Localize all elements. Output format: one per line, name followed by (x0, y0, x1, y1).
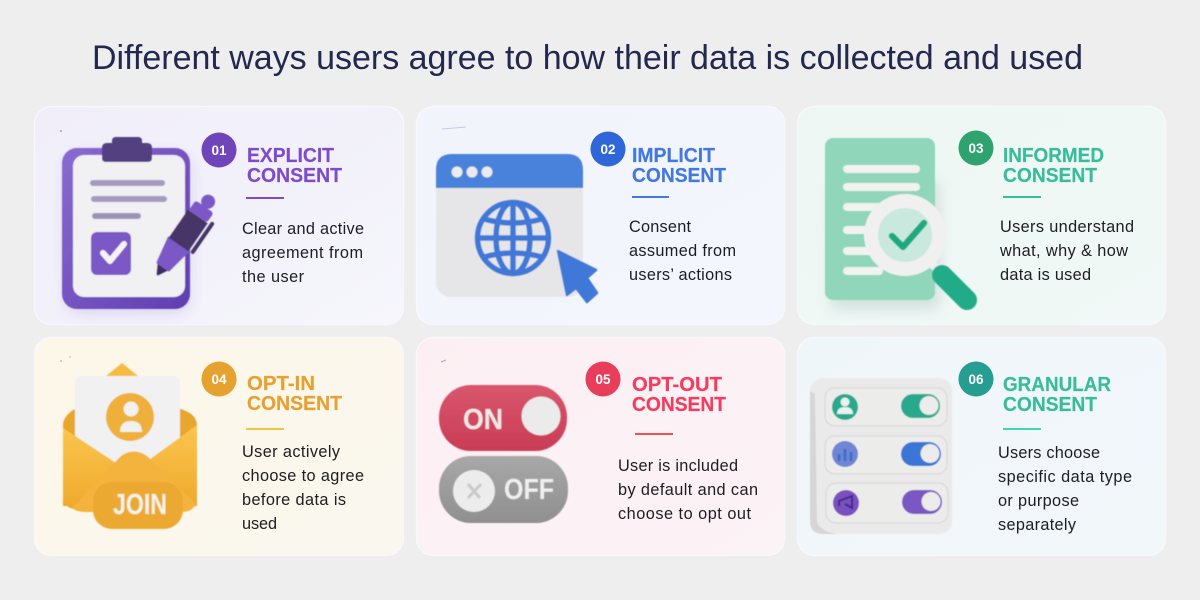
heading (632, 145, 726, 187)
description: assumed from (629, 242, 736, 260)
panel: informed consent (798, 106, 1166, 324)
number badge 05 (586, 362, 620, 396)
description (242, 443, 364, 533)
heading (1003, 374, 1112, 416)
heading: CONSENT (632, 165, 726, 187)
description: agreement from (242, 244, 363, 262)
heading: CONSENT (247, 165, 342, 187)
description (242, 220, 364, 286)
heading: INFORMED (1003, 145, 1104, 167)
heading: CONSENT (247, 393, 342, 415)
heading: EXPLICIT (247, 145, 334, 167)
icon: on and off toggles (439, 385, 568, 523)
icon: clipboard and pen (62, 137, 225, 313)
description: or purpose (998, 492, 1079, 510)
number badge 02: 02 (600, 142, 616, 157)
description: Users understand (1000, 218, 1134, 236)
description: choose to opt out (618, 505, 751, 523)
description: before data is (242, 491, 346, 509)
icon: on and off toggles: ON (463, 404, 503, 436)
icon: browser window with globe and cursor (436, 154, 597, 302)
description: separately (998, 516, 1077, 534)
number badge 01 (202, 132, 236, 168)
number badge 02 (590, 132, 626, 166)
description (629, 218, 736, 284)
icon: envelope with join button (63, 363, 197, 529)
number badge 01: 01 (211, 143, 227, 158)
heading: OPT-OUT (632, 374, 722, 396)
number badge 04 (202, 362, 236, 396)
heading (632, 374, 726, 416)
heading (247, 145, 342, 187)
description (999, 218, 1134, 284)
icon: envelope with join button: JOIN (113, 489, 167, 521)
panel: opt-out consent (416, 338, 784, 556)
description: used (242, 515, 277, 533)
description: Clear and active (242, 220, 364, 238)
number badge 03: 03 (968, 141, 984, 156)
number badge 05: 05 (595, 372, 611, 387)
panel: granular consent (798, 338, 1166, 556)
description: the user (242, 268, 305, 286)
description: by default and can (618, 481, 758, 499)
description: users’ actions (629, 266, 732, 284)
heading: OPT-IN (247, 373, 315, 395)
icon: document with magnifying glass (825, 138, 967, 310)
description: data is used (1000, 266, 1091, 284)
description (998, 444, 1132, 534)
number badge 06 (958, 362, 994, 396)
heading: IMPLICIT (632, 145, 715, 167)
number badge 04: 04 (211, 372, 227, 387)
description: Users choose (998, 444, 1100, 462)
heading: CONSENT (1003, 394, 1097, 416)
description (618, 457, 758, 523)
title: Different ways users agree to how their data is collected and used (92, 39, 1083, 77)
description: choose to agree (242, 467, 364, 485)
heading: GRANULAR (1003, 374, 1112, 396)
heading: CONSENT (632, 394, 726, 416)
heading: CONSENT (1003, 165, 1097, 187)
panel: opt-in consent (34, 338, 404, 556)
number badge 06: 06 (968, 372, 984, 387)
icon: settings panel with toggles (810, 378, 952, 534)
icon: on and off toggles: OFF (504, 474, 554, 506)
description: what, why & how (999, 242, 1128, 260)
description: specific data type (998, 468, 1132, 486)
description: Consent (629, 218, 691, 236)
number badge 03 (958, 130, 994, 166)
description: User actively (242, 443, 341, 461)
heading (1003, 145, 1104, 187)
heading (247, 373, 342, 415)
description: User is included (618, 457, 738, 475)
panel: implicit consent (416, 106, 784, 324)
panel: explicit consent (34, 106, 404, 324)
